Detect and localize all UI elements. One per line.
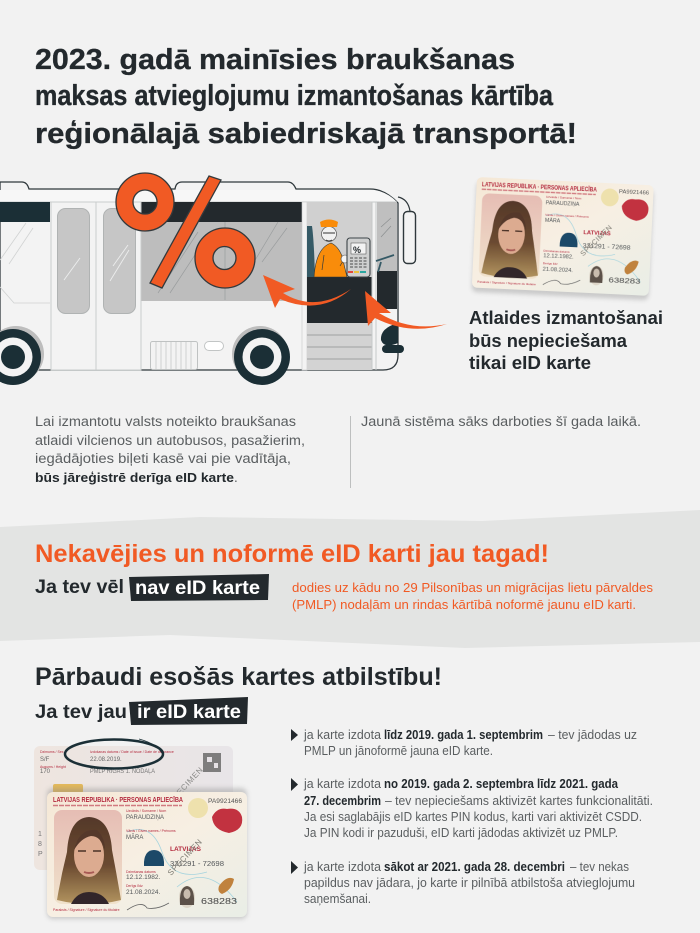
callout: issue date ring: [65, 739, 163, 768]
text block: discount explanation: .: [234, 470, 238, 485]
caption: card requirement: būs nepieciešama: [469, 331, 628, 351]
rule 1: – tev jādodas uz: [548, 728, 637, 742]
caption: card requirement: tikai eID karte: [469, 353, 591, 373]
rule 2: Ja esi saglabājis eID kartes PIN kodus, karti vari aktivizēt CSDD.: [304, 810, 642, 824]
card: eID back: SPECIMEN: [167, 765, 205, 805]
bus body: [0, 182, 398, 370]
icon: driver with payment terminal: %: [353, 245, 361, 255]
card: eID front: 21.08.2024.: [126, 889, 161, 896]
text block: PMLP instructions: dodies uz kādu no 29 Pilsonības un migrācijas lietu pārvaldes: [292, 581, 653, 595]
rule 2: [291, 777, 653, 840]
text block: discount explanation: būs jāreģistrē derīga eID karte: [35, 471, 234, 485]
wheels: [0, 326, 290, 385]
card: eID front, tilted: 21.08.2024.: [542, 266, 574, 274]
heading: check card: Pārbaudi esošās kartes atbilstību!: [35, 663, 442, 691]
card: eID front, tilted: LATVIJAS REPUBLIKA · PERSONAS APLIECĪBA: [482, 181, 597, 194]
rule 2: no 2019. gada 2. septembra līdz 2021. gada: [384, 777, 619, 791]
card: eID front: Uzvārds / Surname / Nom: [126, 809, 166, 813]
rule 1: PMLP un jānoformē jauna eID karte.: [304, 744, 493, 758]
card: eID front, tilted: PARAUDZIŅA: [546, 200, 580, 208]
card: eID front, tilted: 321291 - 72698: [583, 243, 631, 252]
card: eID front, tilted: LATVIJAS: [583, 230, 611, 238]
card: eID front: 638283: [201, 897, 238, 906]
subheading: no eID card: Ja tev vēl: [35, 577, 124, 598]
card: eID front, tilted: MĀRA: [545, 217, 561, 225]
card: eID front: PA9921466: [208, 798, 242, 805]
rule 2: ja karte izdota: [303, 777, 381, 791]
mirror: [398, 197, 416, 264]
title: maksas atvieglojumu izmantošanas kārtība: [35, 80, 554, 112]
arrow: to driver: [365, 291, 447, 329]
card: eID front, tilted: 638283: [608, 276, 641, 286]
card: eID back: Izdošanas datums / Date of issue / Date de délivrance: [90, 750, 174, 754]
card: eID front: MĀRA: [126, 834, 143, 841]
card: eID front: Derīgs līdz: [126, 884, 143, 888]
rule 2: Ja PIN kodi ir pazuduši, eID karti jādodas aktivizēt uz PMLP.: [304, 826, 618, 840]
text block: system start: Jaunā sistēma sāks darboties šī gada laikā.: [361, 414, 641, 429]
card: eID front, tilted: Paraksts / Signature / Signature du titulaire: [477, 279, 536, 286]
card: eID front: LATVIJAS REPUBLIKA · PERSONAS APLIECĪBA: [53, 796, 183, 804]
list: card validity rules: [291, 728, 653, 906]
card: eID back: [34, 746, 233, 870]
card: eID back: S/F: [40, 757, 50, 763]
rule 2: – tev nepieciešams aktivizēt kartes funkcionalitāti.: [385, 794, 653, 808]
heading: apply now: Nekavējies un noformē eID karti jau tagad!: [35, 540, 549, 568]
text block: PMLP instructions: (PMLP) nodaļām un rindas kārtībā noformē jaunu eID karti.: [292, 598, 636, 612]
text block: PMLP instructions: [292, 581, 653, 612]
card: eID back: Augums / Height: [40, 765, 66, 769]
arrow: to window: [263, 275, 351, 308]
card: eID front: 321291 - 72698: [170, 861, 224, 868]
card: eID back: 22.08.2019.: [90, 757, 122, 763]
dark window strip: [0, 202, 302, 222]
icon: driver with payment terminal: [314, 220, 370, 277]
passenger doors: [51, 202, 141, 370]
subheading: no eID card: [35, 574, 269, 601]
card: eID front: Vārds / Given names / Prénoms: [126, 829, 176, 833]
card: eID front, tilted: 12.12.1982.: [543, 253, 574, 261]
text block: discount explanation: atlaidi vilcienos un autobusos, pasažierim,: [35, 433, 305, 448]
side windows: [0, 222, 302, 303]
subheading: no eID card: nav eID karte: [135, 578, 260, 599]
card: eID front, tilted: Vārds / Given names / Prénoms: [545, 213, 589, 219]
rule 1: ja karte izdota: [303, 728, 381, 742]
card: eID front, tilted: SPECIMEN: [579, 223, 614, 258]
card: eID front, tilted: PA9921466: [619, 189, 649, 197]
rule 3: – tev nekas: [570, 860, 629, 874]
card: eID back: P: [38, 851, 43, 858]
card: eID front: LATVIJAS: [170, 846, 202, 853]
rule 3: sākot ar 2021. gada 28. decembri: [384, 860, 565, 874]
card: eID front, tilted: Uzvārds / Surname / Nom: [546, 195, 582, 201]
card: eID front: [47, 788, 247, 919]
card: eID front: 12.12.1982.: [126, 874, 161, 881]
band: apply for eID: [0, 510, 700, 648]
card: eID front, tilted: [472, 177, 654, 300]
text block: discount explanation: Lai izmantotu valsts noteikto braukšanas: [35, 414, 296, 429]
title: [35, 44, 577, 150]
rule 3: [291, 860, 635, 906]
card: eID front: PARAUDZIŅA: [126, 815, 164, 821]
caption: card requirement: Atlaides izmantošanai: [469, 308, 663, 328]
rule 3: saņemšanai.: [304, 892, 371, 906]
subheading: already has eID card: Ja tev jau: [35, 702, 127, 723]
card: eID front: Dzimšanas datums: [126, 870, 156, 874]
rule 2: 27. decembrim: [304, 794, 381, 808]
subheading: already has eID card: [35, 697, 248, 725]
driver door: [302, 202, 376, 370]
icon: percent sign: [116, 173, 255, 288]
rule 1: [291, 728, 637, 758]
windshield and steering wheel: [376, 202, 397, 309]
title: 2023. gadā mainīsies braukšanas: [35, 44, 515, 76]
caption: card requirement: [469, 308, 663, 373]
text block: discount explanation: iegādājoties biļeti kasē vai pie vadītāja,: [35, 451, 291, 466]
text block: discount explanation: [35, 414, 305, 485]
illustration: bus: [0, 182, 416, 385]
subheading: already has eID card: ir eID karte: [137, 702, 241, 723]
card: eID front: SPECIMEN: [166, 837, 204, 877]
card: eID back: 8: [38, 841, 42, 848]
card: eID back: Dzimums / Sex: [40, 750, 64, 754]
rule 3: papildus nav jādara, jo karte ir pilnībā atbilstoša atvieglojumu: [304, 876, 635, 890]
card: eID back: PMLP RĪGAS 1. NODAĻA: [90, 768, 155, 775]
vent and handle: [150, 342, 224, 370]
rule 1: līdz 2019. gada 1. septembrim: [384, 728, 543, 742]
card: eID back: 170: [40, 769, 51, 775]
card: eID back: 1: [38, 831, 42, 838]
card: eID front, tilted: Dzimšanas datums: [543, 249, 570, 254]
title: reģionālajā sabiedriskajā transportā!: [35, 118, 577, 150]
rule 3: ja karte izdota: [303, 860, 381, 874]
card: eID front: Paraksts / Signature / Signature du titulaire: [53, 908, 120, 912]
headlights: [381, 323, 404, 353]
card: eID front, tilted: Derīgs līdz: [543, 261, 558, 266]
